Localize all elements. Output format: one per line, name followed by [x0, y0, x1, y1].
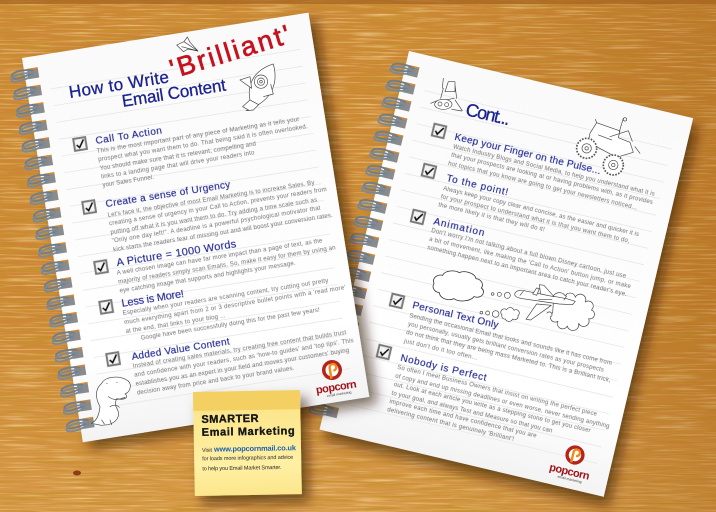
section: a picture = 1000 words: A Picture = 1000 Words — [116, 238, 238, 269]
section: a picture = 1000 words — [93, 223, 338, 298]
logo: popcorn right page: email marketing — [557, 475, 582, 484]
section: create a sense of urgency: creating a sense of urgency in your Call to Action, prevents your readers from — [109, 187, 327, 228]
section: added value content — [105, 315, 357, 400]
icon: paper plane star doodle — [177, 37, 198, 52]
section: personal text only: just don't do it too often... — [402, 338, 478, 362]
section: call to action: You should make sure that it is relevant, compelling and — [99, 141, 256, 172]
section: call to action: links to a landing page that will drive your readers into — [101, 150, 255, 180]
section: keep your finger on the pulse — [425, 123, 659, 215]
section: animation: Animation — [432, 216, 485, 239]
section: create a sense of urgency: Create a sense of Urgency — [105, 179, 231, 210]
small cloud — [501, 308, 519, 321]
section: nobody is perfect — [364, 344, 616, 464]
icon: robot doodle — [431, 78, 462, 111]
note body text: to help you Email Market Smarter. — [202, 465, 282, 472]
panel: right notebook page — [306, 48, 693, 497]
section: less is more: Less is More! — [121, 288, 185, 310]
section: create a sense of urgency: putting off what it is you want them to do. Try adding a time scale such as — [110, 198, 318, 236]
right cloud — [550, 293, 595, 330]
section: nobody is perfect: to your goal, and always Test and Measure so that you can — [391, 391, 553, 434]
aeroplane — [515, 285, 575, 320]
title: Brilliant in red: 'Brilliant' — [166, 19, 293, 84]
logo: popcorn left page: popcorn — [315, 378, 358, 397]
panel: sticky note — [193, 390, 302, 496]
icon: dinosaur doodle — [91, 377, 130, 425]
section: call to action: your Sales Funnel. — [102, 175, 155, 189]
section: call to action — [72, 101, 313, 192]
note top band — [193, 390, 300, 411]
spiral binding — [309, 61, 420, 419]
title: How to Write Email Content — [68, 59, 227, 119]
section: call to action: This is the most important part of any piece of Marketing as it tells your — [96, 117, 300, 155]
section: to the point: To the point! — [445, 173, 509, 198]
section: keep your finger on the pulse: that your prospects are looking at or having problems with, as it provides — [450, 153, 653, 206]
section: added value content: decision away from price and back to your brand values. — [137, 366, 295, 396]
title: How to Write Email Content: How to Write — [68, 67, 170, 102]
section: animation: a bit of movement, like making the 'Call to Action' button jump, or make — [428, 237, 632, 290]
note heading — [201, 412, 295, 439]
section: nobody is perfect: improve each time and have confidence that you are — [389, 399, 538, 440]
note heading: SMARTER — [201, 413, 259, 426]
section: nobody is perfect: delivering content that is genuinely 'Brilliant'! — [386, 407, 515, 443]
big cloud — [433, 271, 484, 301]
note body text: Visit — [202, 448, 213, 454]
note body text: for loads more infographics and advice — [202, 455, 293, 462]
section: nobody is perfect: out. Look at each article you write as a stepping stone to get you closer — [393, 382, 591, 434]
page sheet — [320, 51, 693, 497]
section: nobody is perfect: Nobody is Perfect — [399, 353, 488, 384]
section: animation: Don't worry I'm not talking about a full blown Disney cartoon, just use — [431, 228, 627, 280]
note heading: Email Marketing — [202, 425, 295, 439]
note body text — [202, 443, 297, 472]
logo: popcorn left page — [312, 357, 358, 400]
section: keep your finger on the pulse: hot topics that you know are going to get your newsletters noticed... — [447, 161, 638, 212]
section: a picture = 1000 words: majority of readers simply scan Emails. So, make it easy for them by using an — [118, 246, 336, 286]
logo: popcorn left page: email marketing — [327, 390, 352, 398]
section: personal text only: Sending the occasional Email that looks and sounds like it has come from — [409, 313, 612, 367]
section: create a sense of urgency — [81, 163, 333, 257]
section: to the point: the more likely it is that they will do it! — [438, 203, 545, 234]
section: a picture = 1000 words: A well chosen image can have far more impact than a page of text, as the — [116, 238, 324, 277]
title: How to Write Email Content: Email Content — [121, 76, 227, 111]
section: to the point: for your prospect to understand what it is that you want them to do, — [440, 194, 631, 245]
section: added value content: Instead of creating sales materials, try creating free content that builds trust — [133, 330, 347, 370]
section: keep your finger on the pulse: Keep your Finger on the Pulse... — [453, 132, 602, 177]
panel: left notebook page — [8, 13, 369, 444]
icon: monster truck doodle — [577, 118, 640, 175]
section: create a sense of urgency: Let's face it, the objective of most Email Marketing is to increase Sales. By — [108, 180, 315, 219]
section: personal text only: you personally, usually gets brilliant conversion rates as your prospects — [407, 322, 604, 374]
section: added value content: Added Value Content — [131, 337, 231, 363]
section: personal text only: do not think that they are being mass Marketed to. This is a Brilliant trick, — [405, 330, 611, 384]
section: added value content: and confidence with your readers, such as 'how-to guides' and 'top tips'. This — [134, 338, 354, 379]
note body text: www.popcornmail.co.uk — [213, 443, 297, 454]
section: to the point — [414, 163, 644, 255]
section: animation — [404, 209, 637, 299]
section: call to action: Call To Action — [95, 126, 163, 147]
thought bubbles — [480, 292, 510, 317]
section: less is more: Especially when your readers are scanning content, try cutting out pretty — [122, 279, 329, 317]
section: call to action: prospect what you want them to do. That being said it is often overlooked. — [98, 124, 309, 163]
section: to the point: Always keep your copy clear and concise, as the easier and quicker it is — [442, 186, 639, 238]
section: less is more: Google have been successfully doing this for the past few years! — [141, 308, 321, 342]
icon: rocket doodle — [240, 64, 275, 111]
section: keep your finger on the pulse: Watch Industry Blogs and Social Media, to help you understand what it is — [452, 144, 655, 198]
section: animation: something happen next to an important area to catch your reader's eye. — [427, 245, 628, 298]
section: less is more: at the end, that links to your blog ... — [125, 313, 226, 335]
section: added value content: establishes you as an expert in your field and moves your customers' buying — [135, 348, 350, 388]
icon: thought clouds and aeroplane — [433, 271, 595, 330]
section: personal text only — [381, 293, 619, 393]
section: less is more: much everything apart from 2 or 3 descriptive bullet points with a 'read more' — [124, 285, 346, 326]
section: create a sense of urgency: "Only one day left!". A deadline is a powerful psychological motivator that — [112, 206, 321, 245]
page sheet — [22, 13, 369, 442]
section: nobody is perfect: of copy and end up missing deadlines or even worse, never sending anything — [394, 373, 610, 430]
ruled lines — [51, 49, 351, 408]
spiral binding — [10, 67, 95, 432]
logo: popcorn right page: popcorn — [548, 462, 591, 483]
section: nobody is perfect: So often I meet Business Owners that insist on writing the perfect piece — [396, 365, 598, 418]
logo: popcorn right page — [547, 441, 596, 486]
section: less is more — [98, 263, 349, 347]
note body — [193, 390, 302, 496]
section: a picture = 1000 words: eye catching image that supports and highlights your message. — [119, 261, 296, 295]
section: create a sense of urgency: kick starts the readers fear of missing out and will boost your conversion rates. — [113, 213, 333, 253]
section: personal text only: Personal Text Only — [411, 300, 499, 331]
heading: Cont...: Cont... — [464, 99, 512, 129]
ruled lines — [350, 91, 671, 463]
